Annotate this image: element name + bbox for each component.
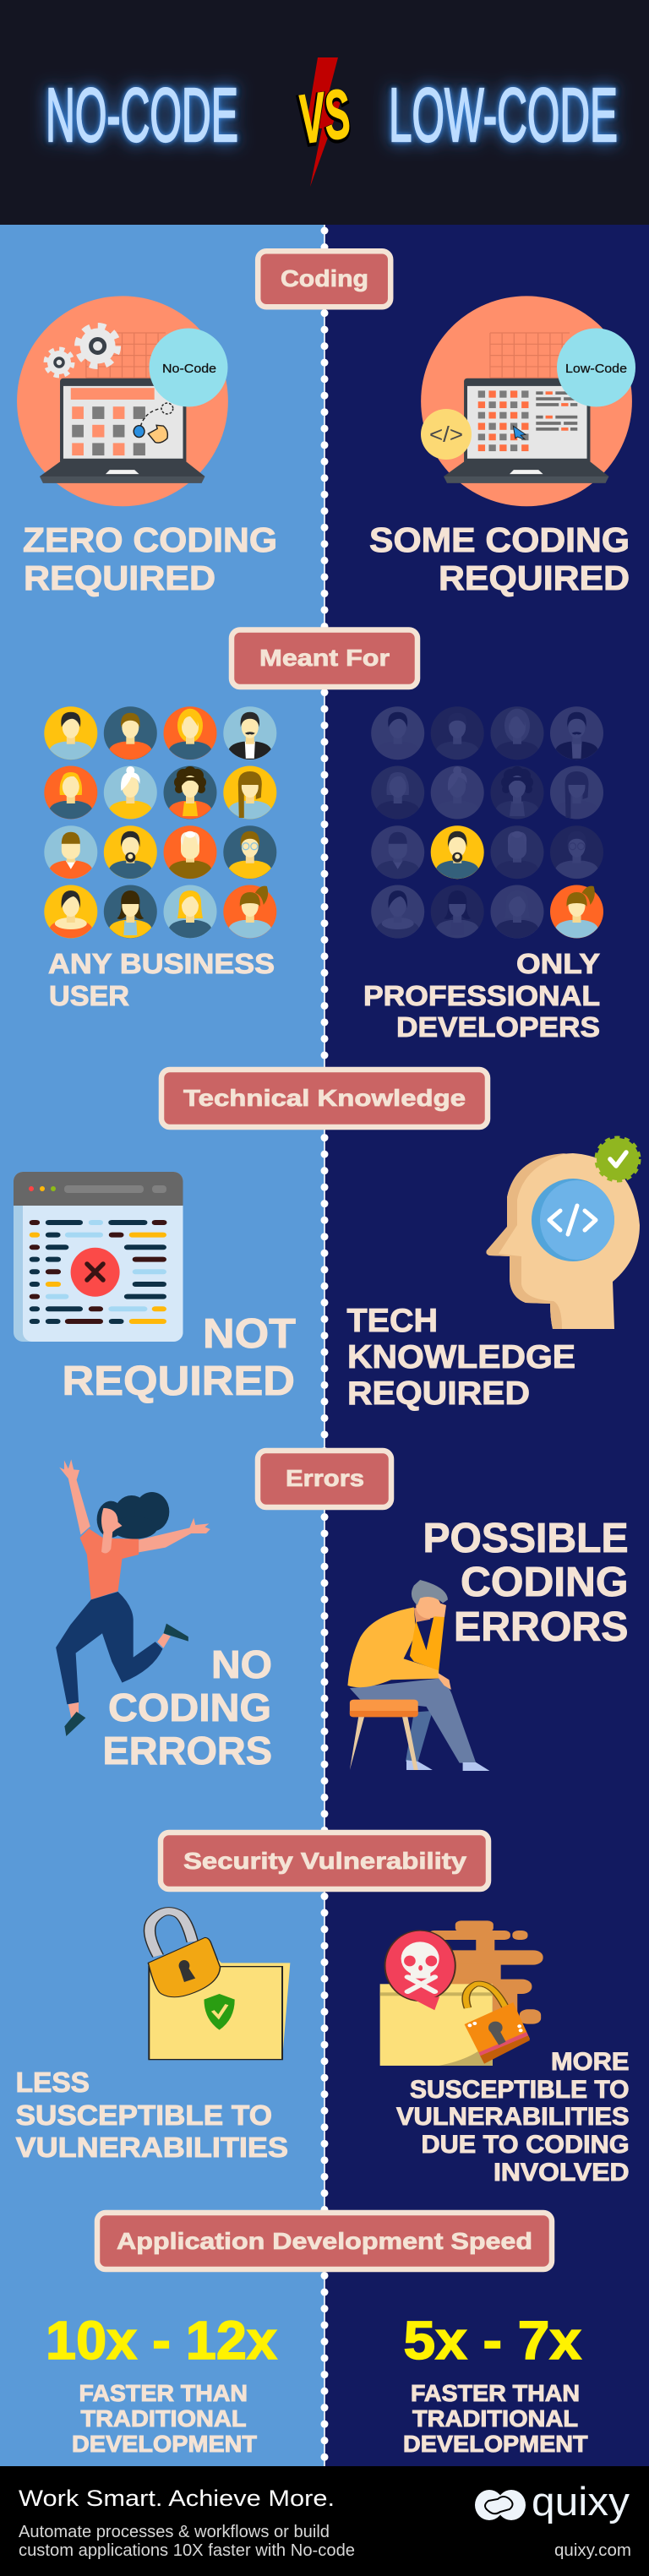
text: tech knowledge required: TECH (346, 1303, 438, 1339)
panel: no-code side (0, 225, 324, 2466)
text: tech knowledge required: KNOWLEDGE (347, 1339, 575, 1375)
stat: 5x - 7x: 5x - 7x (404, 2310, 581, 2371)
vs badge: VS (294, 75, 355, 159)
heading: errors: Errors (286, 1465, 364, 1491)
text: not required (63, 1311, 296, 1404)
section: application development speed (46, 2213, 588, 2457)
text: no coding errors: NO (211, 1642, 272, 1686)
text: more susceptible: INVOLVED (494, 2159, 629, 2187)
text: not required: NOT (203, 1311, 296, 1357)
text: some coding required: REQUIRED (439, 558, 630, 597)
text: low-code faster than traditional development (403, 2380, 588, 2457)
vs badge: VS (292, 77, 355, 161)
icon: code badge: </> (429, 422, 463, 447)
heading: application development speed (97, 2213, 552, 2269)
icon: browser code error (14, 1172, 183, 1342)
text: no-code faster than traditional development: TRADITIONAL (81, 2405, 247, 2432)
heading: technical knowledge: Technical Knowledge (183, 1085, 466, 1111)
vs badge (292, 75, 355, 161)
text: more susceptible: DUE TO CODING (421, 2131, 629, 2159)
text: less susceptible: LESS (16, 2067, 90, 2099)
text: no-code faster than traditional development (72, 2380, 257, 2457)
text: more susceptible (396, 2048, 629, 2187)
text: more susceptible: SUSCEPTIBLE TO (410, 2076, 629, 2104)
section: meant for (44, 630, 603, 1043)
icon: locked folder (148, 1911, 290, 2060)
description: Automate processes & workflows or build (19, 2523, 330, 2541)
icon: head with code (486, 1138, 640, 1329)
illustration: jumping woman (56, 1459, 210, 1736)
text: tech knowledge required (346, 1303, 575, 1412)
text: only professional developers (363, 949, 600, 1043)
text: less susceptible: VULNERABILITIES (16, 2132, 288, 2164)
text: less susceptible: SUSCEPTIBLE TO (16, 2100, 272, 2132)
text: tech knowledge required: REQUIRED (347, 1375, 530, 1412)
illustration: low-code laptop (421, 296, 632, 506)
icon: unlocked folder with skull (380, 1920, 543, 2066)
bubble: low-code (557, 328, 635, 407)
illustration: worried man (347, 1580, 489, 1771)
heading: coding (258, 251, 390, 307)
heading: meant for: Meant For (259, 645, 390, 671)
heading: technical knowledge (161, 1070, 488, 1127)
text: not required: REQUIRED (63, 1359, 295, 1404)
heading: security vulnerability: Security Vulnerability (183, 1848, 467, 1874)
text: more susceptible: MORE (551, 2048, 629, 2076)
avatars: professional developers (371, 706, 603, 938)
text: any business user (48, 949, 275, 1012)
heading: coding: Coding (281, 265, 368, 291)
text: any business user: USER (49, 981, 129, 1012)
avatars: any business user (44, 706, 276, 938)
section: errors (56, 1451, 629, 1773)
text: zero coding required: REQUIRED (24, 558, 215, 597)
text: possible coding errors: POSSIBLE (423, 1515, 629, 1561)
text: zero coding required (23, 520, 277, 597)
text: low-code faster than traditional development: TRADITIONAL (412, 2405, 578, 2432)
text: low-code faster than traditional development: FASTER THAN (411, 2380, 580, 2406)
bubble: low-code: Low-Code (565, 362, 627, 376)
heading: application development speed: Application Development Speed (117, 2228, 532, 2254)
text: no coding errors: ERRORS (103, 1729, 272, 1773)
text: possible coding errors (423, 1515, 629, 1650)
heading: errors (258, 1451, 391, 1507)
logo: quixy (475, 2479, 630, 2524)
section: technical knowledge (14, 1070, 640, 1412)
section: coding (17, 251, 635, 597)
text: some coding required: SOME CODING (369, 520, 630, 559)
text: zero coding required: ZERO CODING (23, 520, 277, 559)
icon: gears (46, 326, 118, 376)
text: only professional developers: PROFESSIONAL (363, 981, 600, 1012)
section: security vulnerability (16, 1833, 630, 2187)
text: no-code faster than traditional development: DEVELOPMENT (72, 2431, 257, 2457)
text: low-code faster than traditional development: DEVELOPMENT (403, 2431, 588, 2457)
description: custom applications 10X faster with No-code (19, 2541, 355, 2560)
header (0, 0, 649, 225)
description (19, 2523, 355, 2560)
heading: meant for (232, 630, 417, 687)
text: only professional developers: DEVELOPERS (396, 1012, 600, 1043)
logo: quixy: quixy (532, 2479, 630, 2524)
text: no coding errors: CODING (108, 1686, 271, 1729)
title: no-code: NO-CODE (46, 74, 238, 158)
bubble: no-code (149, 328, 228, 407)
text: possible coding errors: CODING (461, 1559, 629, 1605)
icon: code badge (421, 409, 472, 460)
text: any business user: ANY BUSINESS (48, 949, 275, 980)
footer (0, 2466, 649, 2576)
text: no coding errors (103, 1642, 272, 1773)
website: quixy.com (554, 2541, 631, 2560)
panel: low-code side (324, 225, 649, 2466)
text: only professional developers: ONLY (516, 949, 600, 980)
icon: lightning bolt (306, 57, 344, 187)
text: some coding required (369, 520, 630, 597)
text: no-code faster than traditional development: FASTER THAN (79, 2380, 248, 2406)
text: more susceptible: VULNERABILITIES (396, 2103, 629, 2131)
tagline: Work Smart. Achieve More. (19, 2486, 335, 2511)
bubble: no-code: No-Code (162, 362, 216, 376)
text: less susceptible (16, 2067, 288, 2164)
text: possible coding errors: ERRORS (454, 1604, 629, 1650)
illustration: no-code laptop (17, 296, 228, 506)
heading: security vulnerability (161, 1833, 488, 1889)
stat: 10x - 12x: 10x - 12x (46, 2310, 277, 2371)
